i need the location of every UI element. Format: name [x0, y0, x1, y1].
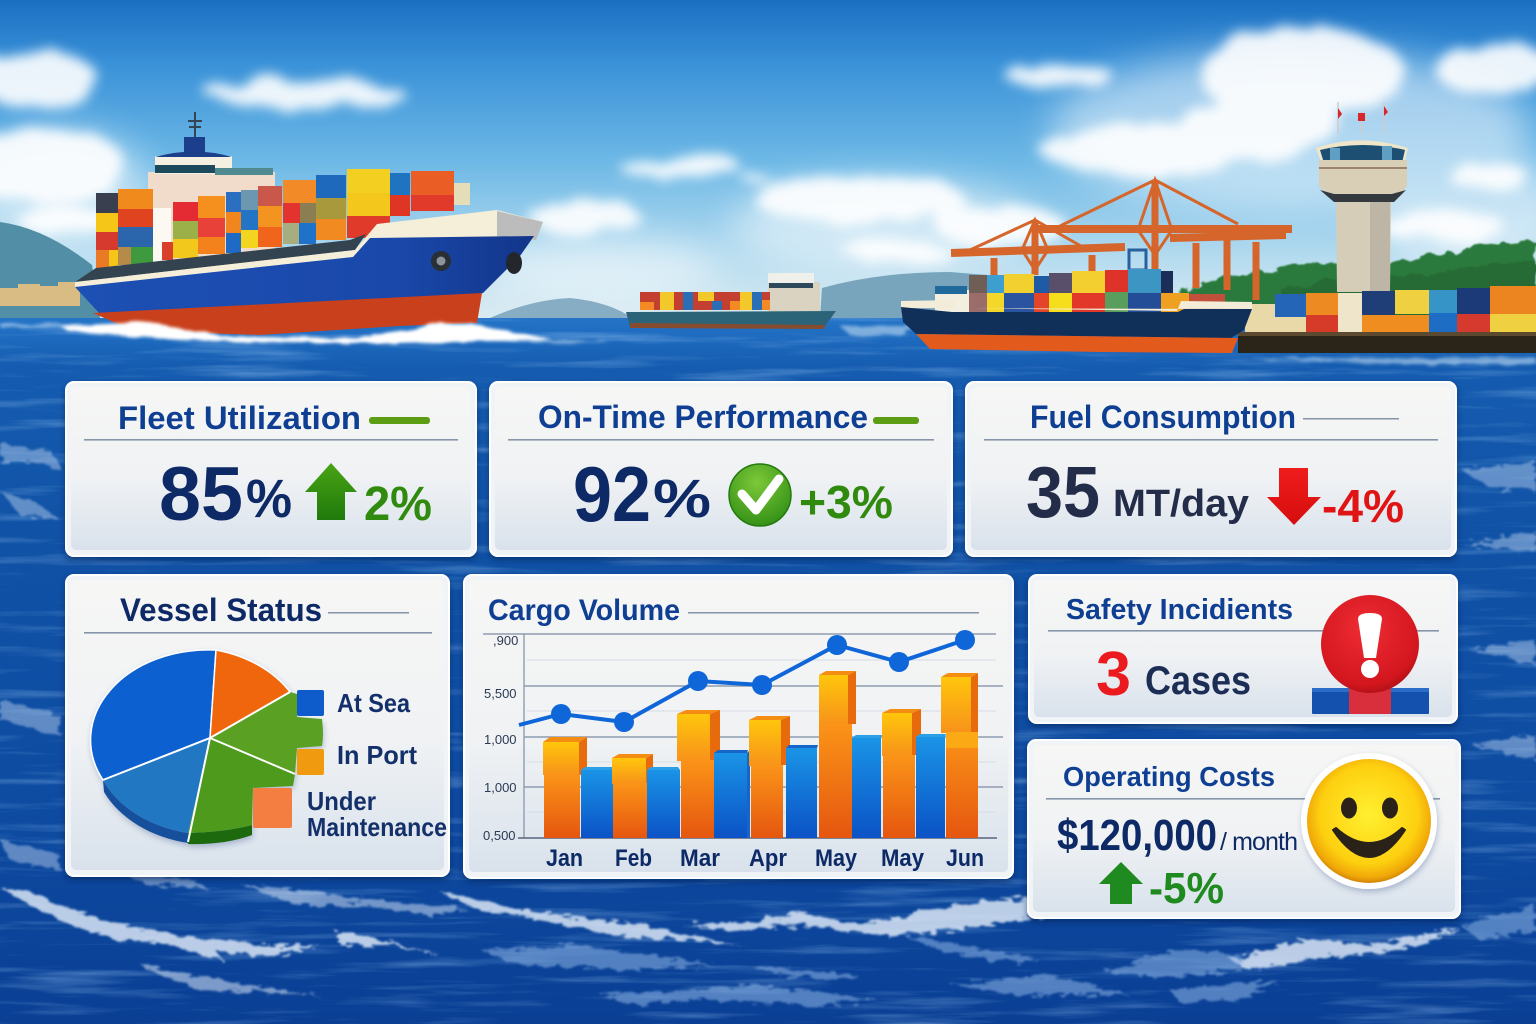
port: cranes: [951, 180, 1292, 300]
legend: Under Maintenance: [253, 786, 447, 842]
panel: Operating Costs: [1028, 740, 1460, 918]
bars: [543, 671, 978, 838]
rule: [84, 439, 458, 441]
delta +3 percent: +3%: [799, 476, 893, 528]
port container stacks and quay: [1238, 286, 1536, 353]
month labels: [546, 845, 984, 872]
bow wave: [60, 322, 550, 344]
heading: Cargo Volume: Cargo Volume: [488, 594, 680, 627]
legend: At Sea: At Sea: [337, 688, 410, 718]
trend line: [519, 630, 975, 732]
heading: Safety Incidients: Safety Incidients: [1066, 594, 1293, 626]
heading: On-Time Performance: On-Time Performance: [538, 399, 868, 435]
anchors: [431, 251, 451, 271]
y-axis labels: 0,500: [483, 828, 516, 843]
icon: up arrow: [305, 463, 357, 520]
distant container ship: [626, 273, 836, 329]
docked container ship: [901, 269, 1252, 353]
rule: [508, 439, 934, 441]
value $120,000: $120,000: [1057, 811, 1217, 860]
panel: Fuel Consumption: [966, 382, 1456, 556]
heading: Operating Costs: Operating Costs: [1063, 761, 1275, 792]
unit Cases: Cases: [1145, 659, 1251, 703]
legend: In Port: In Port: [337, 740, 417, 770]
hull top white band: [75, 210, 543, 288]
icon: check badge: [729, 464, 791, 526]
percent sign: %: [653, 469, 711, 529]
month labels: Apr: [749, 845, 787, 872]
pie chart: [91, 650, 323, 844]
delta 2 percent: 2%: [364, 478, 432, 531]
white wave crests: [0, 445, 1536, 1005]
unit per month: / month: [1220, 828, 1298, 856]
delta -4 percent: -4%: [1322, 480, 1404, 532]
rule: [1048, 630, 1439, 632]
legend: Under Maintenance: Under: [307, 786, 376, 816]
panel: Vessel Status: [66, 575, 449, 876]
value 85 percent: 85: [159, 452, 243, 537]
sea streak texture: [0, 318, 1536, 1024]
legend: In Port: [297, 740, 417, 775]
clouds: [0, 28, 1536, 302]
tree line: [1180, 240, 1536, 320]
control tower with flags: [1316, 102, 1408, 292]
month labels: Mar: [680, 845, 720, 872]
icon: alarm warning: [1312, 595, 1429, 714]
month labels: May: [881, 845, 925, 872]
panel: On-Time Performance: [490, 382, 952, 556]
percent sign: %: [246, 469, 292, 529]
deck gap and railing: [75, 234, 366, 282]
month labels: Jun: [946, 845, 984, 872]
distant hills and shoreline: [0, 222, 1000, 318]
heading: Vessel Status: Vessel Status: [120, 592, 322, 628]
value 92 percent: 92: [573, 450, 651, 538]
heading line: [688, 612, 979, 614]
month labels: May: [815, 845, 858, 872]
rule: [1046, 798, 1440, 800]
value 3: 3: [1096, 640, 1131, 709]
month labels: Jan: [546, 845, 583, 872]
y-axis labels: 1,000: [484, 780, 517, 795]
heading line: [1303, 418, 1399, 420]
panel: Cargo Volume: [464, 575, 1013, 878]
background: sky: [0, 0, 1536, 322]
y-axis labels: 5,500: [484, 686, 517, 701]
delta -5 percent: -5%: [1149, 864, 1224, 913]
heading accent: [369, 417, 430, 424]
month labels: Feb: [615, 845, 652, 872]
icon: down arrow: [1267, 468, 1321, 525]
panel: Safety Incidents: [1029, 575, 1457, 723]
combo chart: cargo volume: [483, 630, 1003, 872]
panel: Fleet Utilization: [66, 382, 476, 556]
y-axis labels: 1,000: [484, 732, 517, 747]
y-axis labels: [483, 633, 518, 843]
legend: At Sea: [297, 688, 410, 718]
heading line: [328, 612, 409, 614]
container stacks: [96, 169, 470, 268]
rule: [984, 439, 1438, 441]
icon: smiley face: [1301, 753, 1437, 889]
rule: [84, 632, 432, 634]
heading: Fleet Utilization: Fleet Utilization: [118, 400, 361, 436]
superstructure: [148, 172, 275, 270]
value 35: 35: [1026, 453, 1100, 533]
legend: Under Maintenance: Maintenance: [307, 812, 447, 842]
unit MT/day: MT/day: [1113, 483, 1249, 525]
icon: up arrow: [1099, 862, 1143, 904]
background: sea: [0, 318, 1536, 1024]
horizon sea glints: [0, 324, 1536, 364]
heading accent: [873, 417, 919, 424]
heading: Fuel Consumption: Fuel Consumption: [1030, 399, 1296, 435]
y-axis labels: ,900: [493, 633, 518, 648]
main container ship: [60, 112, 550, 344]
